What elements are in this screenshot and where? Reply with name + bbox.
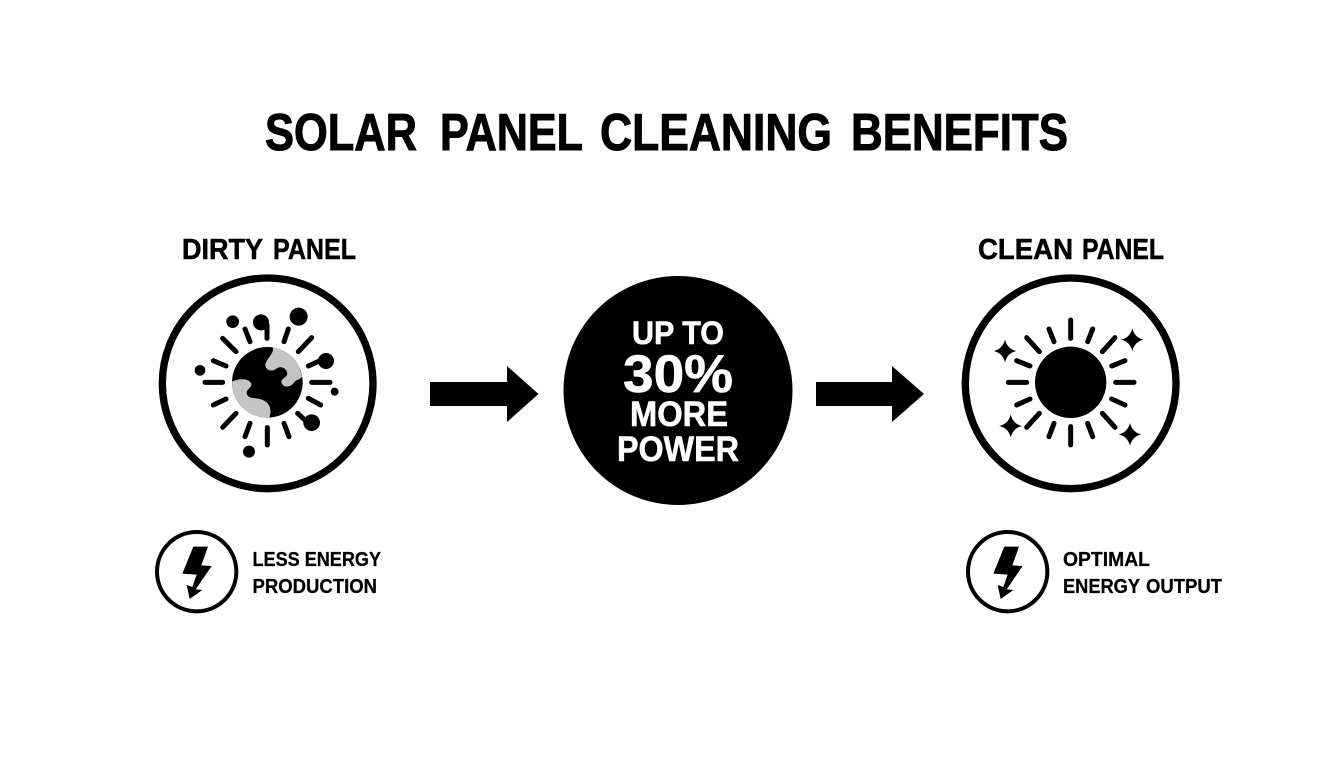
title xyxy=(265,104,1068,162)
heading: clean panel: PANEL xyxy=(1082,234,1164,266)
callout: up to 30% more power: UP TO xyxy=(632,315,724,351)
heading: dirty panel: DIRTY xyxy=(182,234,263,266)
heading: dirty panel: PANEL xyxy=(273,234,356,266)
callout: up to 30% more power xyxy=(564,276,792,505)
panel: clean panel xyxy=(965,234,1222,611)
title: BENEFITS xyxy=(851,104,1068,162)
text: less energy production: LESS ENERGY xyxy=(252,548,381,571)
heading: clean panel xyxy=(978,234,1164,266)
text: less energy production: PRODUCTION xyxy=(252,575,377,598)
heading: dirty panel xyxy=(182,234,356,266)
heading: clean panel: CLEAN xyxy=(978,234,1073,266)
panel: dirty panel xyxy=(157,234,381,611)
arrow: result to clean xyxy=(816,366,924,422)
text: optimal energy output: ENERGY xyxy=(1063,575,1140,598)
title: PANEL xyxy=(440,104,583,162)
callout: up to 30% more power: POWER xyxy=(617,430,739,469)
icon: bright sun with sparkles xyxy=(965,278,1176,489)
text: optimal energy output: OPTIMAL xyxy=(1063,548,1150,571)
callout: up to 30% more power: MORE xyxy=(630,395,728,434)
text: optimal energy output: OUTPUT xyxy=(1146,575,1222,598)
callout: up to 30% more power: 30% xyxy=(623,345,733,404)
title: CLEANING xyxy=(600,104,832,162)
arrow: dirty to result xyxy=(430,366,538,422)
text: less energy production xyxy=(252,548,381,598)
icon: lightning bolt, optimal energy xyxy=(968,532,1047,611)
icon: lightning bolt, less energy xyxy=(157,532,236,611)
title: SOLAR xyxy=(265,104,417,162)
text: optimal energy output xyxy=(1063,548,1222,598)
icon: dirty globe with dust particles xyxy=(162,278,373,489)
